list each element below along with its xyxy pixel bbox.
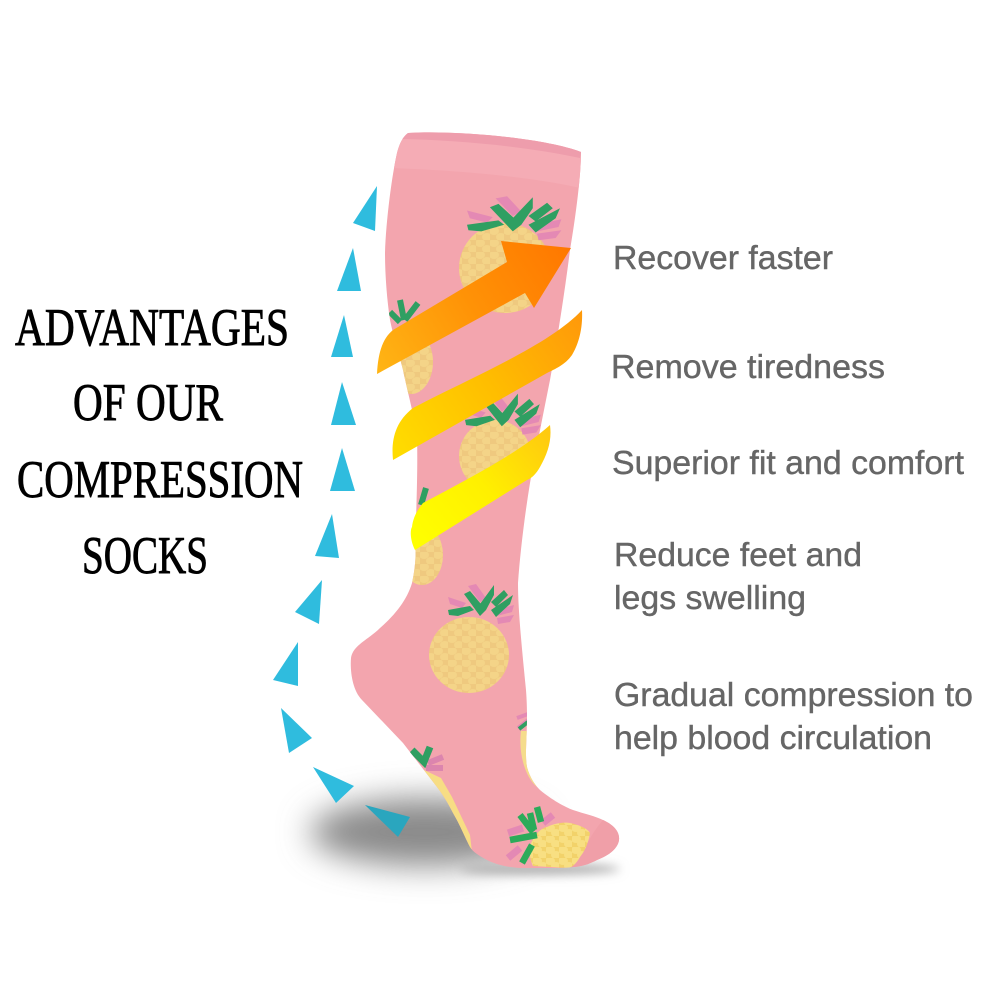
title: ADVANTAGES bbox=[15, 299, 289, 357]
sock cuff band bbox=[394, 132, 581, 188]
pineapple: sole bbox=[412, 747, 472, 852]
benefit labels: legs swelling bbox=[614, 579, 806, 616]
cuff rim bbox=[400, 132, 581, 158]
pineapple: toe bbox=[508, 807, 590, 868]
benefit labels: Recover faster bbox=[613, 239, 833, 276]
arrow: top orange bbox=[377, 241, 571, 374]
benefit labels: Gradual compression to bbox=[614, 676, 973, 713]
blue triangles bbox=[273, 186, 410, 837]
benefit labels bbox=[611, 239, 973, 756]
benefit labels: Reduce feet and bbox=[614, 536, 862, 573]
arrow: middle band bbox=[393, 310, 582, 460]
arrow: lower band bbox=[411, 425, 551, 550]
pineapple: large bbox=[429, 584, 514, 693]
title: SOCKS bbox=[82, 527, 208, 585]
sock body bbox=[350, 132, 620, 868]
benefit labels: Remove tiredness bbox=[611, 348, 885, 385]
pineapple: top bbox=[459, 196, 561, 313]
benefit labels: Superior fit and comfort bbox=[612, 444, 964, 481]
pineapple: right edge bbox=[517, 714, 537, 787]
benefit labels: help blood circulation bbox=[614, 719, 932, 756]
floor shadow bbox=[310, 798, 620, 875]
title bbox=[15, 299, 303, 585]
pineapple: upper left bbox=[389, 300, 433, 394]
sock bbox=[350, 132, 620, 868]
title: OF OUR bbox=[73, 374, 224, 432]
toe cap bbox=[571, 820, 620, 868]
pineapple: lower left bbox=[412, 487, 443, 585]
pineapple: middle bbox=[459, 394, 541, 479]
title: COMPRESSION bbox=[17, 451, 303, 509]
